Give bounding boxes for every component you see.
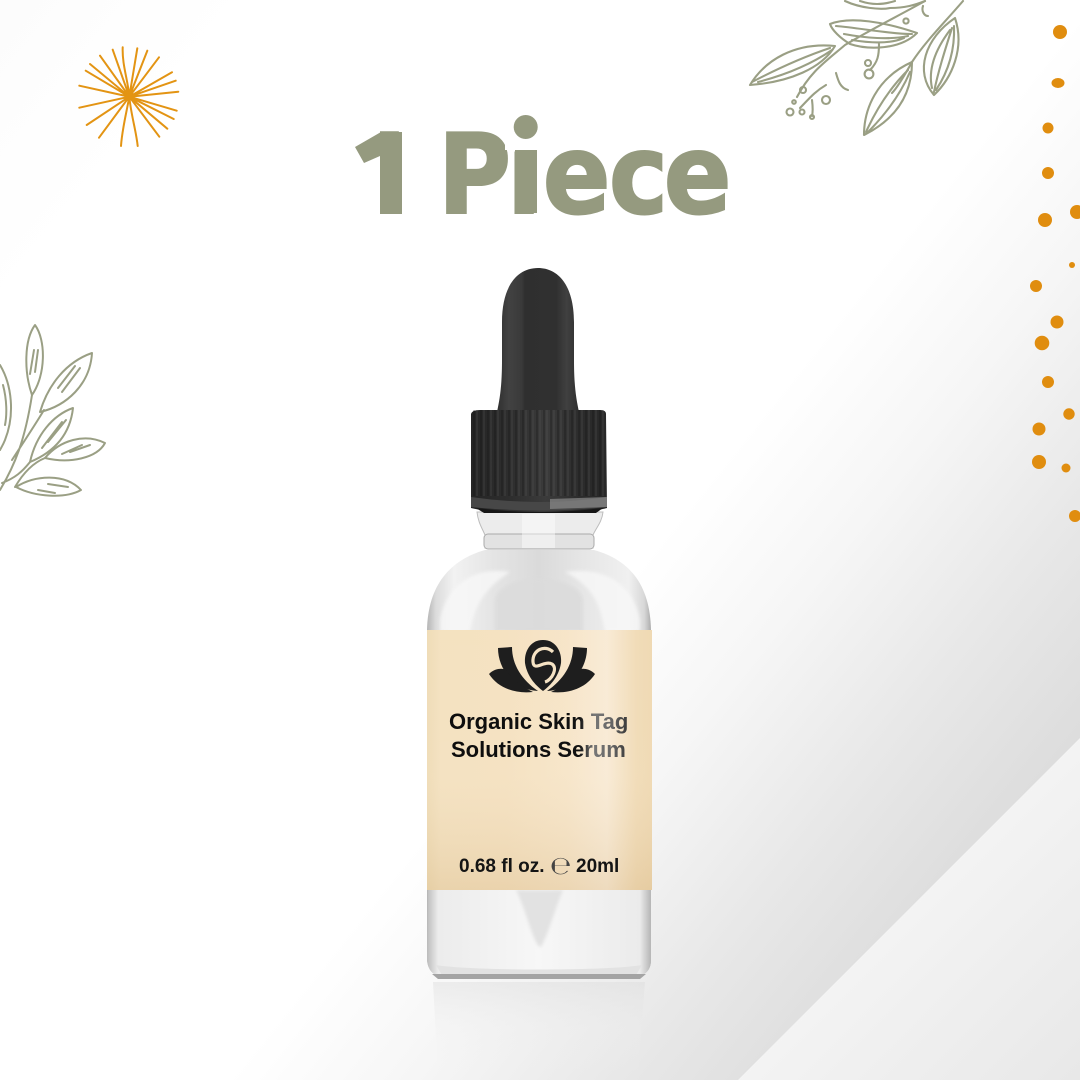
- glass neck: [477, 512, 603, 549]
- logo: lotus: [489, 640, 595, 692]
- label title: Solutions Serum: [451, 737, 626, 762]
- glass body: [427, 550, 651, 976]
- glass highlight: [440, 571, 640, 632]
- cap: [471, 410, 607, 513]
- inner dropper tube: [495, 579, 583, 632]
- dropper bulb: [497, 268, 579, 412]
- dropper tip: [516, 890, 563, 947]
- label: [427, 630, 652, 890]
- label volume: 0.68 fl oz.: [459, 856, 545, 877]
- icon: orange starburst: [79, 47, 178, 146]
- estimated sign: ℮: [550, 851, 571, 880]
- product: serum dropper bottle: [427, 268, 652, 1075]
- bottle reflection: [433, 982, 645, 1075]
- label volume: 20ml: [576, 856, 619, 877]
- label title: Organic Skin Tag: [449, 709, 628, 734]
- lower glass: [427, 889, 651, 976]
- heading: 1 Piece: 1 Piece: [352, 110, 731, 239]
- decoration: orange dots: [1030, 25, 1080, 522]
- illustration: left botanical branch: [0, 325, 105, 496]
- illustration: top right botanical branch: [750, 1, 963, 135]
